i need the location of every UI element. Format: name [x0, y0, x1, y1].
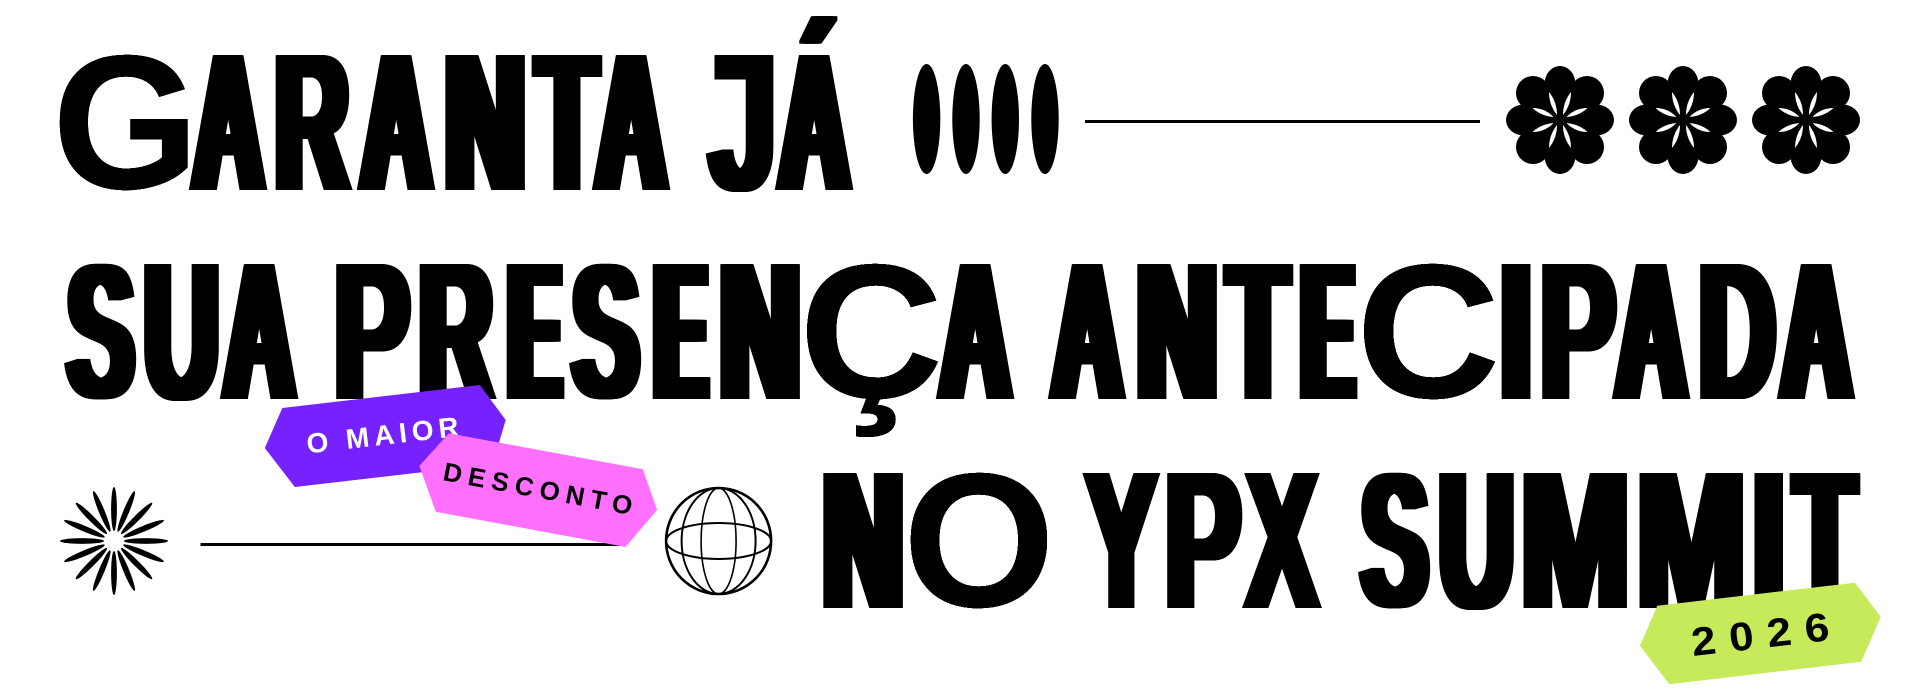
- heading line 2: SUA PRESENÇA ANTECIPADA: P: [334, 222, 410, 441]
- heading line 3: NO YPX SUMMIT: T: [1795, 431, 1855, 650]
- heading line 3: NO YPX SUMMIT: S: [1361, 434, 1428, 648]
- heading line 1: GARANTA JÁ: T: [537, 13, 597, 232]
- icon: three flowers: [1506, 66, 1860, 174]
- heading line 2: SUA PRESENÇA ANTECIPADA: Ç: [799, 225, 943, 438]
- heading line 1: GARANTA JÁ: G: [53, 16, 199, 230]
- heading line 2: SUA PRESENÇA ANTECIPADA: E: [1303, 222, 1352, 441]
- icon: four tall ellipses: [913, 64, 1059, 174]
- heading line 3: NO YPX SUMMIT: X: [1246, 431, 1318, 650]
- heading line 2: SUA PRESENÇA ANTECIPADA: R: [419, 222, 492, 441]
- heading line 2: SUA PRESENÇA ANTECIPADA: U: [144, 222, 219, 441]
- heading line 2: SUA PRESENÇA ANTECIPADA: N: [720, 222, 800, 441]
- heading line 3: NO YPX SUMMIT: [823, 431, 1860, 650]
- icon: starburst: [60, 487, 168, 595]
- heading line 3: NO YPX SUMMIT: U: [1439, 431, 1514, 650]
- heading line 2: SUA PRESENÇA ANTECIPADA: E: [656, 222, 705, 441]
- heading line 1: GARANTA JÁ: J: [709, 13, 777, 232]
- tag: 2026: 2026: [1689, 603, 1845, 665]
- divider line bottom: [200, 543, 626, 546]
- divider line top: [1085, 120, 1480, 123]
- heading line 2: SUA PRESENÇA ANTECIPADA: A: [225, 222, 294, 441]
- heading line 2: SUA PRESENÇA ANTECIPADA: S: [572, 225, 639, 438]
- heading line 1: GARANTA JÁ: R: [275, 13, 349, 232]
- heading line 2: SUA PRESENÇA ANTECIPADA: P: [1540, 222, 1616, 441]
- heading line 2: SUA PRESENÇA ANTECIPADA: C: [1356, 225, 1500, 438]
- heading line 1: GARANTA JÁ: A: [193, 13, 263, 232]
- heading line 2: SUA PRESENÇA ANTECIPADA: E: [510, 222, 559, 441]
- tag: DESCONTO: DESCONTO: [441, 456, 641, 522]
- heading line 2: SUA PRESENÇA ANTECIPADA: A: [1782, 222, 1851, 441]
- heading line 3: NO YPX SUMMIT: O: [903, 434, 1055, 648]
- heading line 2: SUA PRESENÇA ANTECIPADA: A: [1617, 222, 1686, 441]
- heading line 1: GARANTA JÁ: A: [362, 13, 431, 232]
- heading line 3: NO YPX SUMMIT: I: [1742, 431, 1796, 650]
- heading line 3: NO YPX SUMMIT: Y: [1086, 431, 1157, 650]
- heading line 2: SUA PRESENÇA ANTECIPADA: A: [941, 222, 1010, 441]
- heading line 1: GARANTA JÁ: [53, 13, 854, 232]
- heading line 1: GARANTA JÁ: A: [597, 13, 666, 232]
- heading line 2: SUA PRESENÇA ANTECIPADA: D: [1699, 222, 1775, 441]
- heading line 1: GARANTA JÁ: N: [445, 13, 525, 232]
- heading line 1: GARANTA JÁ: Á: [780, 13, 849, 232]
- heading line 2: SUA PRESENÇA ANTECIPADA: [64, 222, 1856, 441]
- tag: O MAIOR: [265, 385, 506, 487]
- heading line 2: SUA PRESENÇA ANTECIPADA: T: [1228, 222, 1288, 441]
- heading line 2: SUA PRESENÇA ANTECIPADA: I: [1489, 222, 1543, 441]
- letter J top bar: [714, 55, 746, 80]
- heading line 2: SUA PRESENÇA ANTECIPADA: N: [1137, 222, 1217, 441]
- heading line 2: SUA PRESENÇA ANTECIPADA: S: [67, 225, 133, 438]
- heading line 3: NO YPX SUMMIT: N: [824, 431, 903, 650]
- heading line 3: NO YPX SUMMIT: M: [1521, 431, 1630, 650]
- tag: O MAIOR: O MAIOR: [305, 411, 465, 459]
- heading line 3: NO YPX SUMMIT: P: [1165, 431, 1241, 650]
- tag: 2026: [1640, 583, 1881, 684]
- icon: wireframe globe: [666, 488, 771, 594]
- tag: DESCONTO: [419, 433, 657, 547]
- heading line 2: SUA PRESENÇA ANTECIPADA: A: [1053, 222, 1122, 441]
- heading line 3: NO YPX SUMMIT: M: [1637, 431, 1746, 650]
